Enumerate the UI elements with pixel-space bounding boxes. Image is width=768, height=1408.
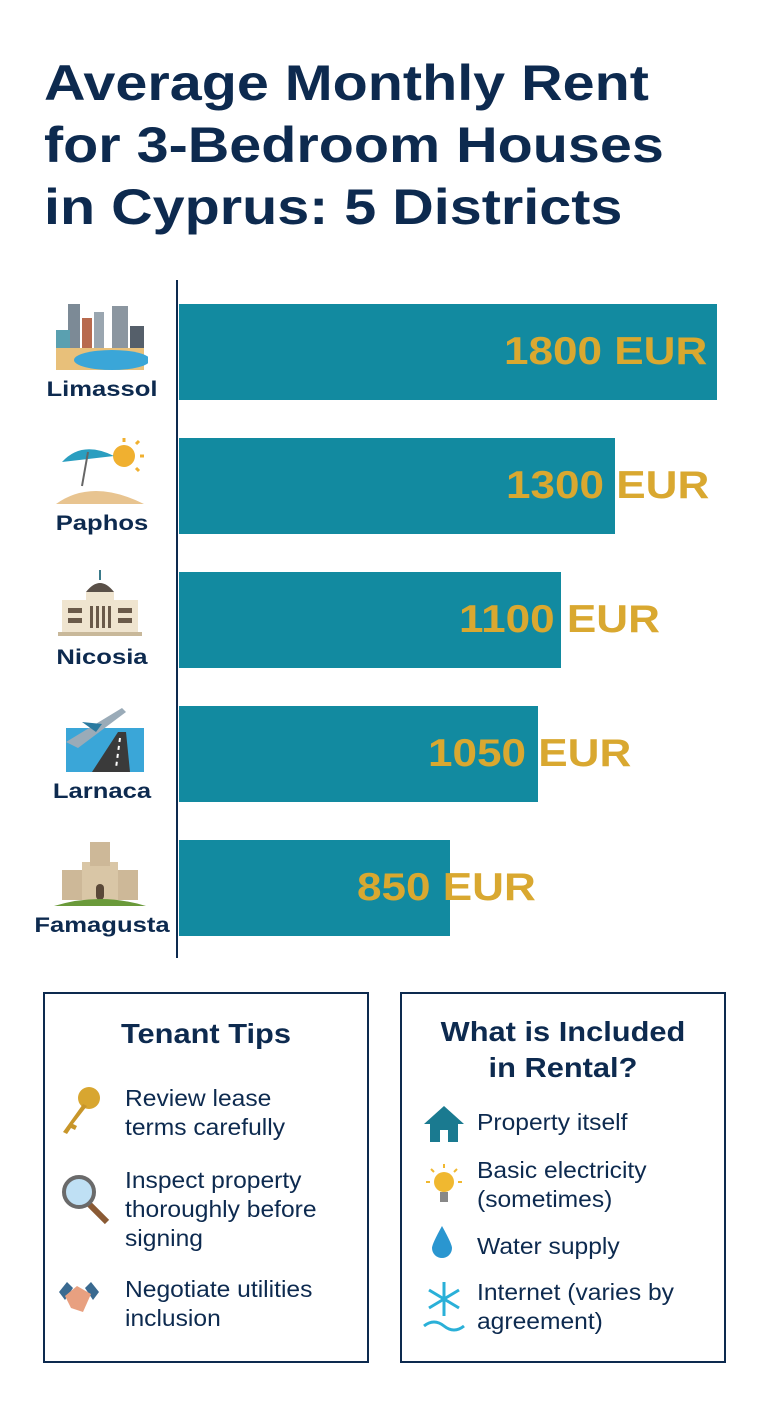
item: electricity: Basic electricity — [477, 1157, 647, 1183]
item: internet: Internet (varies by — [477, 1279, 674, 1305]
icon: Limassol city — [56, 304, 148, 370]
label: Nicosia: Nicosia — [56, 646, 148, 669]
icon: handshake — [59, 1282, 99, 1312]
icon: house — [424, 1106, 464, 1142]
icon: Larnaca airport — [66, 708, 144, 772]
bar: Nicosia — [179, 572, 561, 668]
tip 2 — [125, 1167, 317, 1251]
item: internet: agreement) — [477, 1308, 603, 1334]
item: internet — [477, 1279, 674, 1334]
item: water: Water supply — [477, 1233, 620, 1259]
value: Paphos: 1300 EUR — [506, 464, 709, 507]
tip 2: thoroughly before — [125, 1196, 317, 1222]
heading: What is Included: What is Included — [441, 1016, 685, 1047]
tip 1: Review lease — [125, 1085, 271, 1111]
panel: Tenant Tips — [43, 992, 369, 1363]
bar chart — [179, 304, 717, 936]
tip 1: terms carefully — [125, 1114, 285, 1140]
item: electricity: (sometimes) — [477, 1186, 612, 1212]
icon: Nicosia building — [58, 570, 142, 636]
panel: What is Included — [400, 992, 726, 1363]
tip 3: Negotiate utilities — [125, 1276, 312, 1302]
heading: What is Included: in Rental? — [489, 1052, 637, 1083]
item: electricity — [477, 1157, 647, 1212]
value: Larnaca: 1050 EUR — [428, 732, 631, 775]
bar: Limassol — [179, 304, 717, 400]
label: Famagusta: Famagusta — [34, 914, 170, 937]
title: in Cyprus: 5 Districts — [44, 179, 622, 235]
bar: Paphos — [179, 438, 615, 534]
chart axis — [176, 280, 178, 958]
icon: magnifier — [62, 1175, 110, 1224]
tip 3 — [125, 1276, 312, 1331]
value: Famagusta: 850 EUR — [357, 866, 536, 909]
tip 2: signing — [125, 1225, 203, 1251]
tip 3: inclusion — [125, 1305, 221, 1331]
label: Paphos: Paphos — [56, 512, 148, 535]
title: for 3-Bedroom Houses — [44, 117, 664, 173]
tip 1 — [125, 1085, 285, 1140]
value: Limassol: 1800 EUR — [504, 330, 707, 373]
heading: What is Included — [440, 1016, 685, 1083]
title: Average Monthly Rent — [44, 55, 649, 111]
icon: water drop — [432, 1226, 452, 1258]
bar: Famagusta — [179, 840, 450, 936]
label: Limassol: Limassol — [46, 378, 158, 401]
icon: key — [63, 1087, 100, 1134]
title — [44, 55, 664, 235]
icon: bulb — [426, 1164, 462, 1202]
bar: Larnaca — [179, 706, 538, 802]
tip 2: Inspect property — [125, 1167, 301, 1193]
value: Nicosia: 1100 EUR — [459, 598, 660, 641]
item: property: Property itself — [477, 1109, 627, 1135]
heading: Tenant Tips: Tenant Tips — [121, 1018, 291, 1049]
label: Larnaca: Larnaca — [53, 780, 151, 803]
icon: Famagusta castle — [54, 842, 146, 906]
icon: Paphos beach — [56, 438, 144, 504]
icon: snowflake — [423, 1282, 465, 1332]
